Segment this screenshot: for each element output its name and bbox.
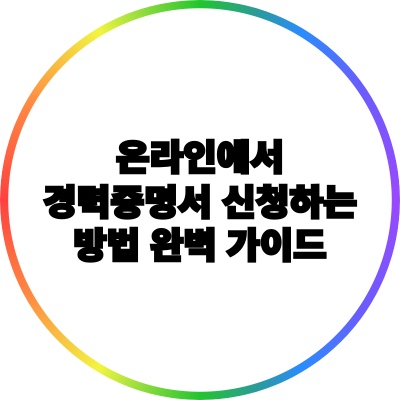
title line 3: 방법 완벽 가이드 xyxy=(74,227,326,266)
title line 2: 경력증명서 신청하는 xyxy=(43,184,357,223)
title line 1: 온라인에서 xyxy=(116,139,284,178)
